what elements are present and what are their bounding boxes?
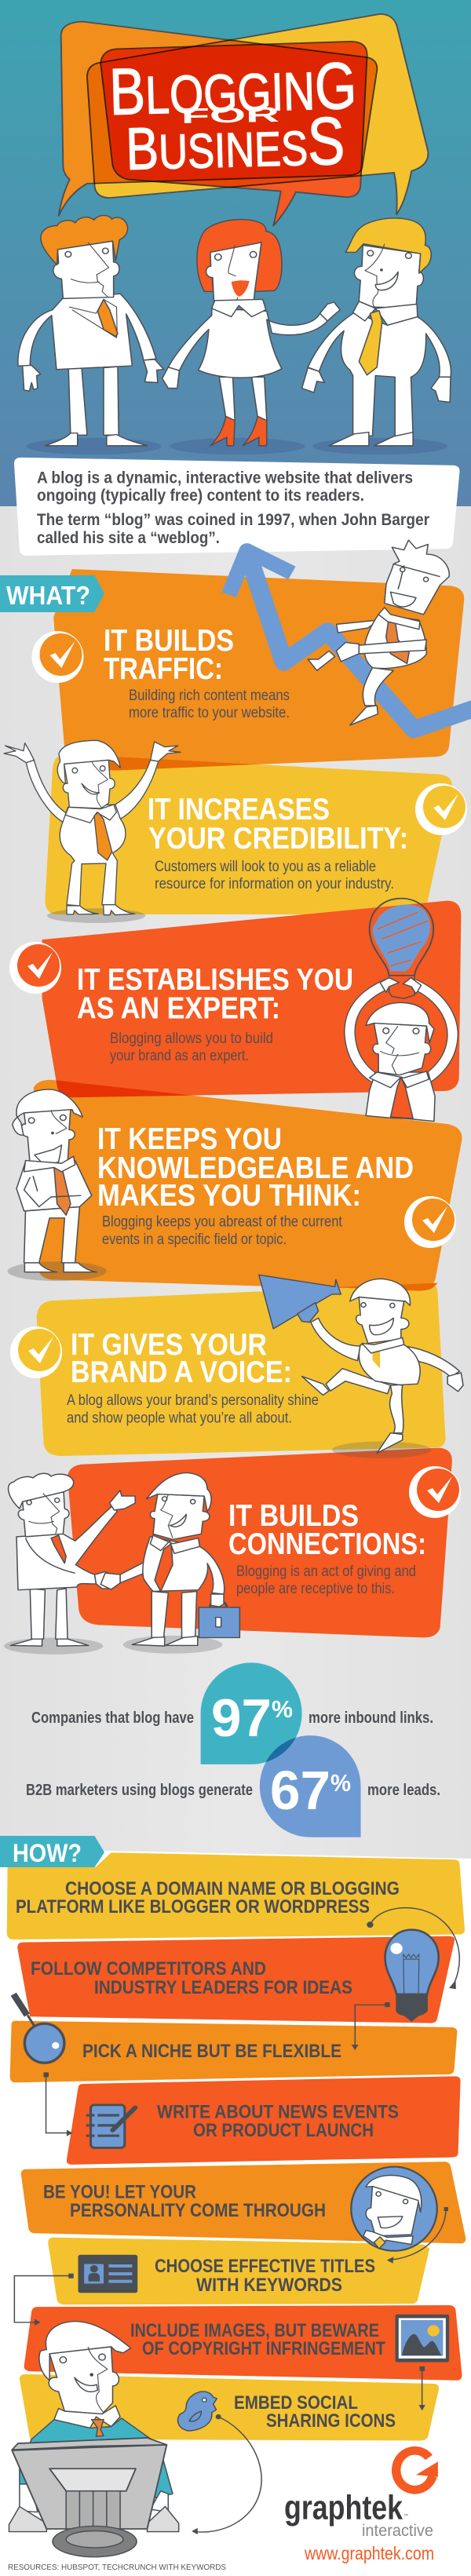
arrow: card to step 7: [14, 2274, 74, 2326]
arrow: magnifier to step 4: [43, 2072, 73, 2136]
step 8 text: SHARING ICONS: [266, 2410, 396, 2432]
text: it builds traffic: IT BUILDS: [104, 624, 234, 658]
HOW? tag: [0, 1836, 104, 1867]
step 7 text: [130, 2320, 385, 2359]
step 6 text: CHOOSE EFFECTIVE TITLES: [155, 2256, 375, 2277]
intro text box: called his site a “weblog”.: [37, 529, 220, 547]
step 1 text: CHOOSE A DOMAIN NAME OR BLOGGING: [65, 1878, 400, 1899]
icon: portrait in circle: [351, 2167, 437, 2251]
step 4 text: WRITE ABOUT NEWS EVENTS: [157, 2102, 399, 2122]
text: it builds traffic: [104, 624, 290, 721]
stat: 67 percent: [26, 1760, 440, 1821]
character: man at computer: [9, 2322, 179, 2557]
step 2 text: INDUSTRY LEADERS FOR IDEAS: [94, 1977, 352, 1998]
arrow: rising blue arrow: [229, 550, 471, 729]
stat shapes: [201, 1662, 361, 1837]
step 2 text: [31, 1958, 352, 1998]
panel: it establishes you as an expert: [34, 900, 462, 1291]
panel: it builds traffic: [45, 569, 464, 914]
logo: graphtek interactive: ™: [403, 2513, 408, 2519]
text: established expert: IT ESTABLISHES YOU: [77, 963, 353, 997]
text: brand voice: A blog allows your brand’s personality shine: [67, 1392, 319, 1409]
character: man with yellow hair: [302, 218, 451, 446]
text: builds connections: Blogging is an act of giving and: [236, 1563, 416, 1580]
intro text box: ongoing (typically free) content to its readers.: [37, 487, 364, 505]
text: established expert: Blogging allows you to build: [110, 1031, 273, 1047]
text: increases credibility: IT INCREASES: [148, 793, 330, 826]
stat: 97 percent: %: [272, 1695, 293, 1723]
icon: magnifying glass: [13, 1994, 64, 2063]
step 7 text: OF COPYRIGHT INFRINGEMENT: [142, 2338, 385, 2359]
step 3 text: PICK A NICHE BUT BE FLEXIBLE: [82, 2041, 341, 2062]
text: increases credibility: [148, 793, 408, 892]
character: man with curly hair shaking hands: [4, 1473, 135, 1655]
stat: 97 percent: Companies that blog have: [31, 1709, 194, 1727]
text: it builds traffic: TRAFFIC:: [104, 652, 223, 686]
step 8 text: EMBED SOCIAL: [234, 2392, 358, 2414]
arrow: bird to computer: [192, 2414, 261, 2534]
text: knowledgeable: MAKES YOU THINK:: [97, 1179, 361, 1213]
hero background: [0, 0, 471, 507]
step 8 text: [234, 2392, 396, 2432]
step 6 text: [155, 2256, 375, 2296]
character: woman with red hair: [162, 220, 340, 446]
icon: profile card: [78, 2255, 137, 2293]
text: established expert: AS AN EXPERT:: [77, 992, 280, 1025]
text: increases credibility: resource for information on your industry.: [155, 876, 394, 892]
icon: notebook and pencil: [86, 2105, 135, 2147]
stat: 97 percent: 97: [211, 1688, 272, 1748]
icon: picture: [396, 2315, 449, 2362]
step 2 text: FOLLOW COMPETITORS AND: [31, 1958, 266, 1979]
panel: it increases your credibility: [45, 754, 452, 914]
step 4 text: [157, 2102, 399, 2141]
title: FOR: [181, 103, 279, 128]
text: it builds traffic: more traffic to your website.: [129, 705, 290, 721]
text: knowledgeable: IT KEEPS YOU: [97, 1122, 282, 1156]
how steps banners: [7, 1852, 465, 2165]
step 5 text: PERSONALITY COME THROUGH: [70, 2200, 326, 2221]
text: brand voice: and show people what you’re all about.: [67, 1410, 292, 1427]
step 7 text: INCLUDE IMAGES, BUT BEWARE: [130, 2320, 379, 2341]
arrow: portrait to step 6: [387, 2207, 448, 2264]
text: knowledgeable: KNOWLEDGEABLE AND: [97, 1151, 414, 1185]
character: man with briefcase: [100, 1472, 239, 1654]
logo: graphtek interactive: interactive: [362, 2522, 433, 2540]
text: brand voice: IT GIVES YOUR: [71, 1328, 267, 1362]
step 5 text: [43, 2182, 326, 2221]
WHAT? tag: WHAT?: [6, 581, 90, 610]
text: knowledgeable: Blogging keeps you abreast of the current: [102, 1213, 343, 1231]
logo: graphtek interactive: www.graphtek.com: [304, 2543, 434, 2563]
character: man with raised arms: [4, 740, 181, 923]
title: BUSINESS: [125, 104, 345, 184]
text: increases credibility: Customers will look to you as a reliable: [155, 859, 376, 875]
text: it builds traffic: Building rich content means: [129, 688, 290, 704]
arrow: picture to step 8: [418, 2366, 425, 2410]
step 4 text: OR PRODUCT LAUNCH: [193, 2120, 374, 2141]
stat: 97 percent: more inbound links.: [309, 1709, 433, 1727]
stat: 67 percent: 67: [270, 1760, 330, 1821]
panel: it gives your brand a voice: [37, 1284, 452, 1637]
stat: 67 percent: more leads.: [367, 1782, 440, 1799]
intro text box: The term “blog” was coined in 1997, when John Barger: [37, 511, 429, 529]
logo: graphtek interactive: graphtek: [284, 2488, 403, 2527]
text: brand voice: BRAND A VOICE:: [71, 1356, 292, 1389]
text: brand voice: [67, 1328, 319, 1427]
stat: 97 percent: [31, 1688, 433, 1748]
character: man riding arrow: [308, 540, 449, 725]
icon: check connections: [409, 1466, 461, 1518]
logo: graphtek interactive: [284, 2450, 438, 2563]
character: man with megaphone: [259, 1275, 463, 1458]
step 1 text: [16, 1878, 400, 1917]
icon: bird: [178, 2392, 217, 2431]
text: established expert: [77, 963, 353, 1064]
arrow: bulb to step 3: [352, 2002, 390, 2050]
stat: 67 percent: %: [330, 1769, 351, 1797]
text: knowledgeable: events in a specific field or topic.: [102, 1231, 287, 1248]
icon: check knowledgeable: [404, 1196, 456, 1248]
speech bubbles: [59, 14, 428, 225]
step 5 text: BE YOU! LET YOUR: [43, 2182, 196, 2202]
HOW? tag: HOW?: [13, 1839, 82, 1867]
ground shadows: [26, 438, 447, 454]
character: man with orange hair: [18, 215, 164, 446]
grey content background: [0, 506, 471, 1859]
arrow: curved to step 2: [367, 1908, 459, 1989]
text: established expert: your brand as an expert.: [110, 1048, 249, 1064]
step 1 text: PLATFORM LIKE BLOGGER OR WORDPRESS: [16, 1896, 370, 1917]
stat: 67 percent: B2B marketers using blogs generate: [26, 1782, 253, 1799]
text: increases credibility: YOUR CREDIBILITY:: [148, 822, 408, 856]
WHAT? tag: [0, 575, 104, 612]
intro text box: A blog is a dynamic, interactive website that delivers: [37, 469, 413, 487]
character: thinking man: [8, 1089, 107, 1281]
text: builds connections: CONNECTIONS:: [228, 1527, 426, 1561]
icon: check traffic: [31, 631, 83, 683]
title: BLOGGING: [108, 49, 357, 129]
title: [108, 49, 357, 184]
resources note: RESOURCES: HUBSPOT, TECHCRUNCH WITH KEYWORDS: [8, 2563, 226, 2572]
text: builds connections: [228, 1499, 426, 1597]
icon: check voice: [10, 1326, 62, 1378]
step 6 text: WITH KEYWORDS: [196, 2275, 342, 2296]
icon: light bulb: [385, 1930, 439, 2022]
icon: check expert: [9, 942, 61, 994]
overlap of keep-knowledgeable and voice panels: [330, 1283, 438, 1291]
text: builds connections: IT BUILDS: [228, 1499, 359, 1533]
character: man holding light bulb: [349, 899, 453, 1122]
text: knowledgeable: [97, 1122, 414, 1248]
icon: check credibility: [415, 783, 467, 835]
text: builds connections: people are receptive to this.: [236, 1581, 395, 1597]
intro text box: [14, 458, 460, 556]
